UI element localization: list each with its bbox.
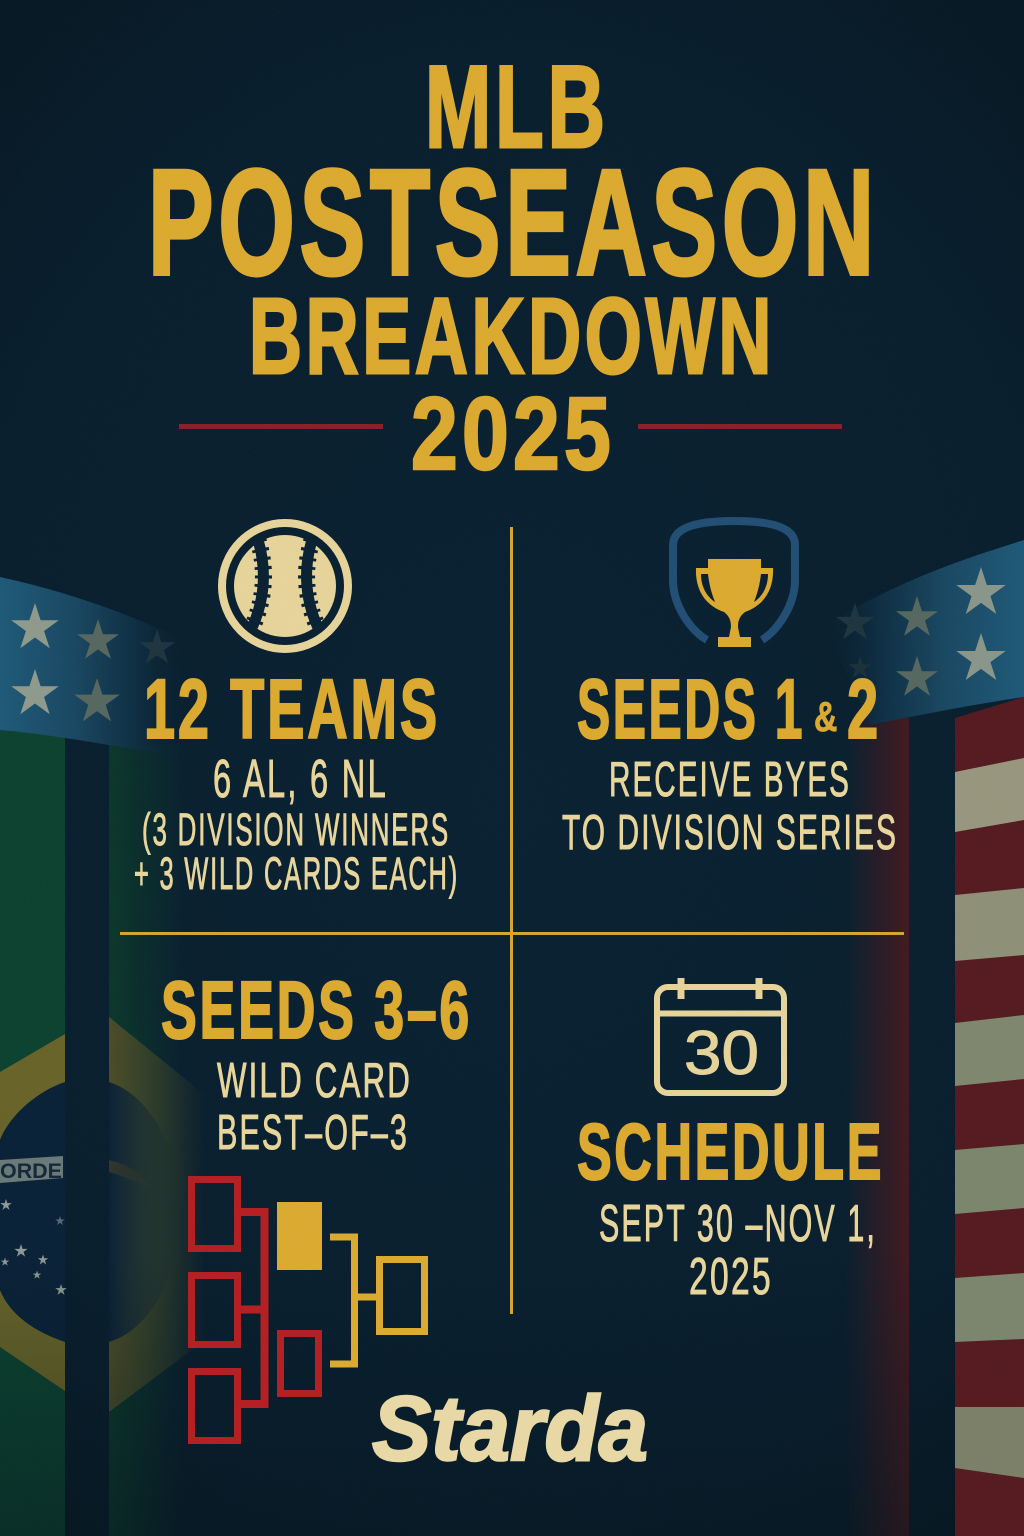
right ribbon with stars xyxy=(825,540,1024,725)
heading: seeds 1 and 2: 2 xyxy=(847,662,881,756)
heading: seeds 1 and 2: & xyxy=(814,693,839,740)
Brazil flag backdrop xyxy=(0,730,205,1536)
title line: 2025: 2025 xyxy=(411,376,615,491)
Brazil flag backdrop: ORDE xyxy=(0,1160,62,1183)
text: 3 division winners: (3 DIVISION WINNERS xyxy=(142,804,450,855)
text: 6 AL, 6 NL: 6 AL, 6 NL xyxy=(213,749,388,809)
text: wild card: WILD CARD xyxy=(217,1054,412,1108)
heading: 12 teams: 12 TEAMS xyxy=(144,662,440,756)
logo: Starda: Starda xyxy=(372,1378,648,1480)
panel: seeds 1 and 2 xyxy=(562,521,898,860)
panel: seeds 3 to 6 xyxy=(161,965,472,1440)
heading: seeds 1 and 2: SEEDS 1 xyxy=(577,662,805,756)
bottom shading xyxy=(0,1250,955,1536)
title line: MLB: MLB xyxy=(425,41,609,172)
text: receive byes: RECEIVE BYES xyxy=(609,753,851,807)
US flag stripes backdrop xyxy=(845,697,1024,1536)
panel: schedule xyxy=(577,978,884,1306)
text: 3 wild cards each: + 3 WILD CARDS EACH) xyxy=(134,848,459,899)
icon: calendar xyxy=(657,978,784,1093)
grid divider horizontal xyxy=(120,932,904,935)
panel: 12 teams xyxy=(134,523,459,899)
red rule left xyxy=(179,424,383,429)
icon: trophy with shield xyxy=(673,521,795,647)
title line: BREAKDOWN: BREAKDOWN xyxy=(249,275,775,396)
text: best of 3: BEST–OF–3 xyxy=(217,1106,409,1160)
grid divider vertical xyxy=(510,527,513,1314)
heading: seeds 3-6: SEEDS 3–6 xyxy=(161,965,472,1056)
text: year: 2025 xyxy=(689,1248,773,1306)
left ribbon with stars xyxy=(0,577,185,757)
icon: playoff bracket xyxy=(192,1180,424,1440)
icon: calendar: 30 xyxy=(684,1019,759,1088)
title xyxy=(148,41,879,491)
red rule right xyxy=(638,424,842,429)
icon: baseball xyxy=(222,523,348,649)
